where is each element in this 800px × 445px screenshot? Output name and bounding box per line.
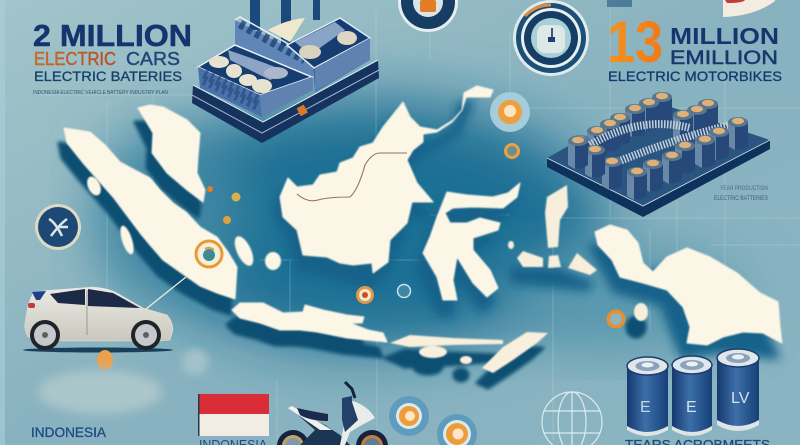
illustration: electric motorbike: [277, 382, 388, 445]
car wheels: [30, 320, 161, 350]
illustration: electric car: [23, 287, 173, 352]
icon: top-centre badge: [398, 0, 458, 32]
faded note smudge: [38, 349, 208, 414]
left module: [198, 45, 312, 95]
island: Papua: [595, 225, 782, 345]
icon: Java sea ring: [398, 284, 410, 298]
headline number: 2 MILLION: [33, 18, 192, 53]
motorbike wheels: [277, 430, 309, 445]
car ground shadow: [23, 348, 173, 352]
islands: Mentawai and Riau: [84, 174, 281, 270]
right module: [287, 18, 370, 92]
array cells: back row: [570, 92, 718, 168]
top blue tab: [607, 0, 632, 7]
caption: YEAR PRODUCTION: [720, 186, 768, 192]
car windows: [50, 289, 85, 305]
headline word: MILLION: [670, 23, 779, 49]
second headline word: EMILLION: [670, 48, 778, 69]
map shadows: [59, 122, 645, 388]
island: Malay Peninsula: [138, 105, 205, 202]
map: Indonesia archipelago: [59, 86, 782, 388]
factory chimneys: [250, 0, 320, 46]
flag: Indonesia: [198, 394, 269, 436]
icon: Papua sea marker: [606, 310, 626, 328]
array coil: [590, 124, 730, 165]
island: Borneo: [280, 86, 493, 273]
island: Java: [232, 303, 387, 342]
illustration: motorbike battery array: [547, 92, 770, 217]
caption second line: ELECTRIC BATTERIES: [714, 196, 768, 202]
subhead: electric cars: ELECTRIC: [34, 49, 116, 69]
flag: top right: [723, 0, 775, 17]
subhead: electric batteries: ELECTRIC BATERIES: [34, 68, 182, 84]
island: Sumatra: [64, 128, 237, 299]
headline number: 13: [607, 10, 663, 75]
label: Indonesia left: INDONESIA: [31, 425, 106, 440]
Borneo border line: [297, 153, 407, 201]
icon: orange marker near Sulawesi: [490, 92, 530, 132]
callout line: car to Sumatra: [146, 277, 186, 309]
illustration: EV battery cells: [627, 349, 759, 436]
motorbike seat: [297, 408, 328, 421]
icon: plug badge: [35, 204, 81, 250]
motorbike handlebar: [345, 382, 355, 398]
islands: Lesser Sunda and Timor: [390, 332, 548, 373]
factory battery tops: [209, 56, 288, 93]
battery cell one: E: [640, 399, 651, 416]
battery cell three: LV: [731, 390, 750, 407]
illustration: battery factory: [192, 0, 379, 143]
icon: Sumatra marker: [196, 241, 222, 267]
icon: battery badge: [513, 0, 589, 76]
battery cell two: E: [686, 399, 697, 416]
eastern map shadows: [275, 101, 777, 357]
island: Sulawesi: [423, 183, 520, 300]
icon: orange charge tag: [97, 350, 113, 370]
motorbike fairing: [340, 401, 375, 445]
subhead: electric motorbikes: ELECTRIC MOTORBIKES: [608, 68, 782, 84]
car rear details: [32, 291, 46, 300]
back module: [235, 20, 313, 90]
heading: 13 million electric motorbikes: [607, 10, 782, 202]
heading: 2 million electric cars: [33, 18, 192, 96]
car body: [25, 287, 173, 341]
array cells: front row: [568, 117, 748, 200]
icon: bottom orange marker one: [389, 396, 429, 436]
array plate: [547, 140, 770, 217]
factory base: [192, 60, 379, 143]
icon: small marker: [504, 143, 520, 159]
icon: bottom orange marker two: [437, 414, 477, 445]
icon: globe: [542, 392, 602, 445]
motorbike frame: [290, 408, 350, 445]
factory orange label: [297, 105, 308, 116]
icon: Java marker: [356, 286, 374, 304]
icons: small Sumatra-strait markers: [207, 186, 240, 224]
subhead: electric cars: CARS: [126, 49, 180, 69]
caption: INDONESIA ELECTRIC VEHICLE BATTERY INDUSTRY PLAN: [33, 90, 168, 96]
island: Halmahera and Maluku: [508, 185, 648, 321]
